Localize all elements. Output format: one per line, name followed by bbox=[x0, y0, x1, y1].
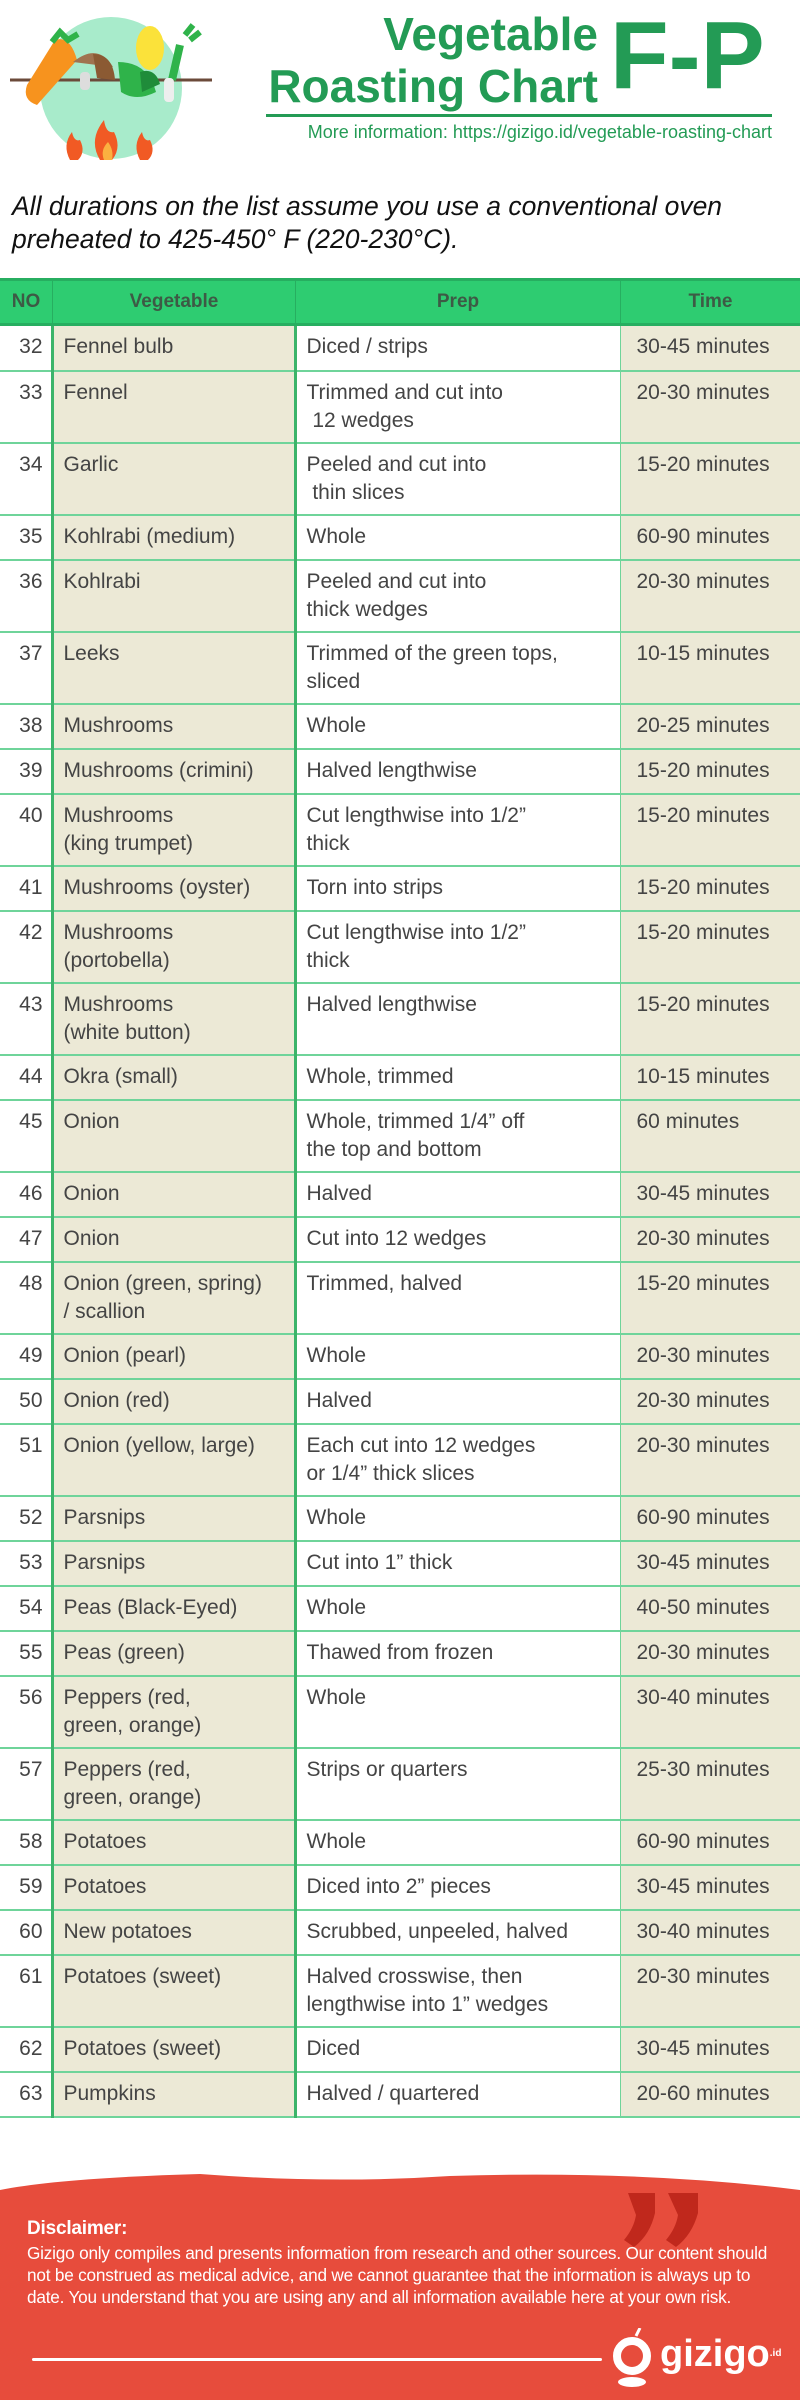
table: vegetables: Whole bbox=[306, 525, 366, 548]
table: vegetables: 62 bbox=[19, 2037, 42, 2060]
table: vegetables: Diced into 2” pieces bbox=[306, 1875, 491, 1898]
table: vegetables: 47 bbox=[19, 1227, 42, 1250]
table: vegetables bbox=[0, 326, 800, 2118]
table: vegetables: 39 bbox=[19, 759, 42, 782]
table: vegetables: New potatoes bbox=[64, 1920, 192, 1943]
table: vegetables: 20-30 minutes bbox=[636, 1434, 770, 1457]
table: vegetables: Mushrooms (crimini) bbox=[64, 759, 254, 782]
table: vegetables: 20-25 minutes bbox=[636, 714, 770, 737]
table: vegetables: Mushrooms bbox=[64, 804, 173, 827]
table: vegetables: (king trumpet) bbox=[64, 832, 193, 855]
title: Roasting Chart bbox=[268, 60, 598, 112]
table: vegetables: Strips or quarters bbox=[306, 1758, 468, 1781]
table: vegetables: Whole bbox=[306, 1596, 366, 1619]
table: vegetables: Thawed from frozen bbox=[306, 1641, 493, 1664]
more info link: More information: https://gizigo.id/vegetable-roasting-chart bbox=[308, 122, 772, 142]
table: vegetables: (white button) bbox=[64, 1021, 191, 1044]
table: vegetables: Diced / strips bbox=[306, 335, 428, 358]
table: vegetables: Pumpkins bbox=[64, 2082, 156, 2105]
table: vegetables: 20-60 minutes bbox=[636, 2082, 770, 2105]
table: vegetables: 32 bbox=[19, 335, 42, 358]
table: vegetables: thick bbox=[306, 832, 350, 855]
table: vegetables: the top and bottom bbox=[306, 1138, 482, 1161]
table: vegetables: Torn into strips bbox=[306, 876, 443, 899]
table: vegetables: 60-90 minutes bbox=[636, 1506, 770, 1529]
logo: gizigo: gizigo.id bbox=[660, 2333, 781, 2375]
table: vegetables: Halved / quartered bbox=[306, 2082, 479, 2105]
table: vegetables: Peas (Black-Eyed) bbox=[64, 1596, 237, 1619]
table: vegetables: 30-45 minutes bbox=[636, 1182, 770, 1205]
table: vegetables: Halved crosswise, then bbox=[306, 1965, 522, 1988]
table: vegetables: 41 bbox=[19, 876, 42, 899]
table: vegetables: 15-20 minutes bbox=[636, 804, 770, 827]
table: vegetables: 30-45 minutes bbox=[636, 2037, 770, 2060]
table: vegetables: Onion bbox=[64, 1182, 120, 1205]
table: vegetables: 60-90 minutes bbox=[636, 525, 770, 548]
table: vegetables: 20-30 minutes bbox=[636, 570, 770, 593]
table: vegetables: Peppers (red, bbox=[64, 1686, 191, 1709]
table: vegetables: Whole bbox=[306, 1830, 366, 1853]
table: vegetables: 20-30 minutes bbox=[636, 1227, 770, 1250]
table: vegetables: 20-30 minutes bbox=[636, 1641, 770, 1664]
table: vegetables: 60 bbox=[19, 1920, 42, 1943]
table: vegetables: Parsnips bbox=[64, 1506, 145, 1529]
table: vegetables: 38 bbox=[19, 714, 42, 737]
table: vegetables: thin slices bbox=[312, 481, 405, 504]
table: vegetables: Each cut into 12 wedges bbox=[306, 1434, 535, 1457]
table: vegetables: 15-20 minutes bbox=[636, 453, 770, 476]
table: vegetables: Mushrooms bbox=[64, 993, 173, 1016]
table: vegetables: 30-40 minutes bbox=[636, 1686, 770, 1709]
table: vegetables: 48 bbox=[19, 1272, 42, 1295]
table: vegetables: Whole, trimmed bbox=[306, 1065, 454, 1088]
table: vegetables: 60-90 minutes bbox=[636, 1830, 770, 1853]
table: vegetables: 20-30 minutes bbox=[636, 381, 770, 404]
table: vegetables: Peppers (red, bbox=[64, 1758, 191, 1781]
table header bbox=[0, 278, 800, 326]
table header: Time bbox=[688, 291, 732, 312]
table: vegetables: 30-40 minutes bbox=[636, 1920, 770, 1943]
table: vegetables: 20-30 minutes bbox=[636, 1344, 770, 1367]
table: vegetables: Parsnips bbox=[64, 1551, 145, 1574]
table: vegetables: 52 bbox=[19, 1506, 42, 1529]
table: vegetables: 44 bbox=[19, 1065, 42, 1088]
table: vegetables: Peas (green) bbox=[64, 1641, 185, 1664]
table: vegetables: 45 bbox=[19, 1110, 42, 1133]
table: vegetables: 60 minutes bbox=[636, 1110, 739, 1133]
table: vegetables: Mushrooms bbox=[64, 714, 173, 737]
table: vegetables: 15-20 minutes bbox=[636, 993, 770, 1016]
table: vegetables: lengthwise into 1” wedges bbox=[306, 1993, 548, 2016]
table: vegetables: Onion (green, spring) bbox=[64, 1272, 262, 1295]
footer panel: disclaimer bbox=[0, 2174, 800, 2400]
table: vegetables: Scrubbed, unpeeled, halved bbox=[306, 1920, 568, 1943]
title bbox=[268, 8, 598, 112]
table: vegetables: Halved bbox=[306, 1389, 372, 1412]
table: vegetables: Whole bbox=[306, 1686, 366, 1709]
table: vegetables: 40 bbox=[19, 804, 42, 827]
table: vegetables: Whole bbox=[306, 1344, 366, 1367]
table: vegetables: Mushrooms (oyster) bbox=[64, 876, 250, 899]
table: vegetables: Cut lengthwise into 1/2” bbox=[306, 921, 526, 944]
table: vegetables: Potatoes (sweet) bbox=[64, 1965, 221, 1988]
table: vegetables: 15-20 minutes bbox=[636, 876, 770, 899]
table: vegetables: Whole bbox=[306, 1506, 366, 1529]
table: vegetables: Cut into 1” thick bbox=[306, 1551, 452, 1574]
table: vegetables: Kohlrabi (medium) bbox=[64, 525, 235, 548]
table: vegetables: Halved lengthwise bbox=[306, 993, 477, 1016]
table: vegetables: thick wedges bbox=[306, 598, 428, 621]
table: vegetables: Onion bbox=[64, 1110, 120, 1133]
table: vegetables: Onion (pearl) bbox=[64, 1344, 186, 1367]
table: vegetables: Peeled and cut into bbox=[306, 453, 486, 476]
table header: Vegetable bbox=[130, 291, 218, 312]
table: vegetables: 10-15 minutes bbox=[636, 1065, 770, 1088]
table: vegetables: 49 bbox=[19, 1344, 42, 1367]
table: vegetables: 42 bbox=[19, 921, 42, 944]
table: vegetables: 15-20 minutes bbox=[636, 921, 770, 944]
table: vegetables: Onion bbox=[64, 1227, 120, 1250]
table: vegetables: 20-30 minutes bbox=[636, 1389, 770, 1412]
table: vegetables: Potatoes bbox=[64, 1830, 146, 1853]
table: vegetables: 50 bbox=[19, 1389, 42, 1412]
table: vegetables: Kohlrabi bbox=[64, 570, 141, 593]
table: vegetables: 58 bbox=[19, 1830, 42, 1853]
table: vegetables: Garlic bbox=[64, 453, 118, 476]
table: vegetables: 15-20 minutes bbox=[636, 1272, 770, 1295]
table: vegetables: 37 bbox=[19, 642, 42, 665]
table: vegetables: 57 bbox=[19, 1758, 42, 1781]
table: vegetables: Fennel bbox=[64, 381, 128, 404]
table: vegetables: sliced bbox=[306, 670, 360, 693]
table header: Prep bbox=[437, 291, 479, 312]
table: vegetables: 61 bbox=[19, 1965, 42, 1988]
table: vegetables: Potatoes (sweet) bbox=[64, 2037, 221, 2060]
table: vegetables: green, orange) bbox=[64, 1786, 201, 1809]
table: vegetables: 36 bbox=[19, 570, 42, 593]
intro text: All durations on the list assume you use a conventional oven preheated to 425-450° F (220-230°C). bbox=[12, 191, 722, 254]
table: vegetables: 55 bbox=[19, 1641, 42, 1664]
icon: quote marks bbox=[624, 2193, 698, 2247]
table: vegetables: Fennel bulb bbox=[64, 335, 173, 358]
table: vegetables: 34 bbox=[19, 453, 42, 476]
table: vegetables: Okra (small) bbox=[64, 1065, 178, 1088]
table: vegetables: 30-45 minutes bbox=[636, 1551, 770, 1574]
table: vegetables: 53 bbox=[19, 1551, 42, 1574]
table: vegetables: 12 wedges bbox=[312, 409, 414, 432]
table: vegetables: Trimmed of the green tops, bbox=[306, 642, 558, 665]
table: vegetables: Mushrooms bbox=[64, 921, 173, 944]
table: vegetables: 10-15 minutes bbox=[636, 642, 770, 665]
table: vegetables: 33 bbox=[19, 381, 42, 404]
table: vegetables: Leeks bbox=[64, 642, 120, 665]
table: vegetables: Whole, trimmed 1/4” off bbox=[306, 1110, 524, 1133]
table: vegetables: Diced bbox=[306, 2037, 360, 2060]
table: vegetables: 54 bbox=[19, 1596, 42, 1619]
table: vegetables: 59 bbox=[19, 1875, 42, 1898]
table: vegetables: / scallion bbox=[64, 1300, 145, 1323]
title letters F-P: F-P bbox=[610, 2, 765, 109]
table: vegetables: Halved lengthwise bbox=[306, 759, 477, 782]
table: vegetables: 20-30 minutes bbox=[636, 1965, 770, 1988]
table: vegetables: 56 bbox=[19, 1686, 42, 1709]
table: vegetables: Cut lengthwise into 1/2” bbox=[306, 804, 526, 827]
disclaimer text: Disclaimer: bbox=[27, 2218, 127, 2239]
title: Vegetable bbox=[383, 8, 598, 60]
table: vegetables: Whole bbox=[306, 714, 366, 737]
table: vegetables: 43 bbox=[19, 993, 42, 1016]
logo: gizigo bbox=[613, 2328, 781, 2387]
table: vegetables: thick bbox=[306, 949, 350, 972]
table: vegetables: Trimmed, halved bbox=[306, 1272, 462, 1295]
table: vegetables: 30-45 minutes bbox=[636, 1875, 770, 1898]
table: vegetables: Onion (yellow, large) bbox=[64, 1434, 255, 1457]
logo illustration bbox=[10, 17, 212, 160]
table header: NO bbox=[12, 291, 40, 312]
table: vegetables: 15-20 minutes bbox=[636, 759, 770, 782]
table: vegetables: Halved bbox=[306, 1182, 372, 1205]
table: vegetables: 46 bbox=[19, 1182, 42, 1205]
table: vegetables: Potatoes bbox=[64, 1875, 146, 1898]
table: vegetables: or 1/4” thick slices bbox=[306, 1462, 475, 1485]
table: vegetables: green, orange) bbox=[64, 1714, 201, 1737]
table: vegetables: 40-50 minutes bbox=[636, 1596, 770, 1619]
table: vegetables: (portobella) bbox=[64, 949, 170, 972]
disclaimer text: Gizigo only compiles and presents information from research and other sources. Our content should not be construed as medical advice, and we cannot guarantee that the information is always up to date. You understand that you are using any and all information available here at your own risk. bbox=[27, 2243, 767, 2307]
table: vegetables: Onion (red) bbox=[64, 1389, 170, 1412]
table: vegetables: 30-45 minutes bbox=[636, 335, 770, 358]
table: vegetables: Cut into 12 wedges bbox=[306, 1227, 486, 1250]
table: vegetables: 25-30 minutes bbox=[636, 1758, 770, 1781]
table: vegetables: 51 bbox=[19, 1434, 42, 1457]
table: vegetables: Peeled and cut into bbox=[306, 570, 486, 593]
table: vegetables: 35 bbox=[19, 525, 42, 548]
table: vegetables: 63 bbox=[19, 2082, 42, 2105]
table: vegetables: Trimmed and cut into bbox=[306, 381, 503, 404]
